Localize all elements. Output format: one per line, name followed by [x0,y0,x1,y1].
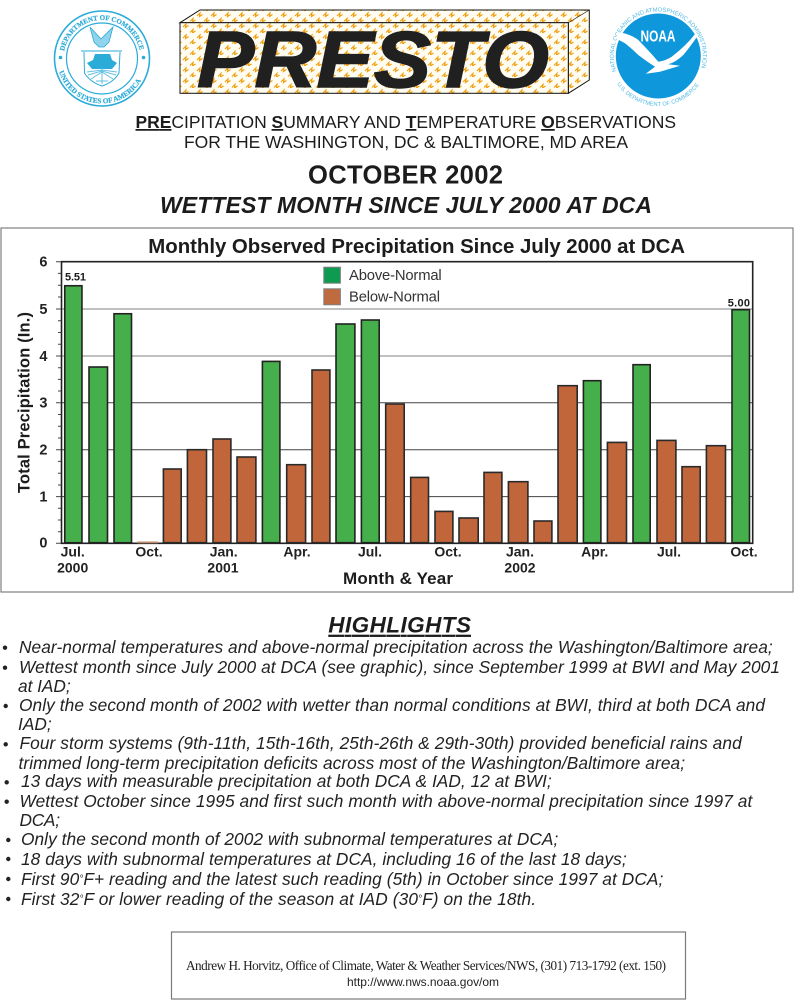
x-axis labels: Jul. [657,544,681,560]
x-axis labels: Jan. [506,544,534,560]
logo: Department of Commerce seal: UNITED STATES OF AMERICA [59,70,142,104]
logo: NOAA emblem: U.S. DEPARTMENT OF COMMERCE [618,82,699,106]
subtitle: PRECIPITATION SUMMARY AND TEMPERATURE OBSERVATIONS [136,112,676,132]
text block: highlights list: First 32 [21,889,79,909]
text block: highlights list: Only the second month of 2002 with subnormal temperatures at DCA; [21,829,558,849]
x-axis labels: 2000 [57,560,88,576]
y-axis numbers: 3 [39,396,48,412]
logo: NOAA emblem [610,7,707,106]
value label: July 2000: 5.51 [65,272,86,284]
x-axis labels: Apr. [283,544,311,560]
text block: highlights list: 18 days with subnormal temperatures at DCA, including 16 of the last 18 days; [21,849,627,869]
y-axis numbers: 4 [39,349,48,365]
chart gridlines and axes [56,262,753,543]
text block: highlights list: Near-normal temperatures and above-normal precipitation across the Washington/Baltimore area; [19,637,773,657]
panel: precipitation chart [1,228,793,592]
subtitle [136,112,676,152]
text block: highlights list: F or lower reading of the season at IAD (30 [84,889,418,909]
x-axis title: Month & Year [343,569,453,588]
y-axis numbers: 1 [39,490,48,506]
value label: October 2002: 5.00 [728,297,750,309]
logo: Department of Commerce seal [54,10,150,107]
x-axis labels: Oct. [434,544,462,560]
panel: author credit [172,932,686,999]
y-axis title: Total Precipitation (In.) [15,312,33,493]
text block: highlights list: 13 days with measurable precipitation at both DCA & IAD, 12 at BWI; [21,771,552,791]
y-axis numbers: 5 [39,302,48,318]
text block: highlights list: ° [79,894,83,905]
text block: highlights list: Wettest month since July 2000 at DCA (see graphic), since September 1999 at BWI and May 2001 [19,657,780,677]
text block: highlights list: F+ reading and the latest such reading (5th) in October since 1997 at DCA; [83,869,663,889]
x-axis labels [57,544,758,576]
text block: highlights list: at IAD; [18,676,71,696]
x-axis labels: Oct. [135,544,163,560]
text block: highlights list: DCA; [20,810,60,830]
text block: highlights list: ° [79,874,83,885]
y-axis numbers: 6 [39,255,48,271]
logo: Department of Commerce seal: DEPARTMENT OF COMMERCE [60,15,144,52]
text block: highlights list: ° [418,894,422,905]
subtitle: FOR THE WASHINGTON, DC & BALTIMORE, MD AREA [184,132,628,152]
x-axis labels: Apr. [581,544,608,560]
title: month: OCTOBER 2002 [308,162,503,190]
text block: highlights list: IAD; [18,714,52,734]
text block: highlights list: F) on the 18th. [422,889,536,909]
x-axis labels: Jul. [61,544,85,560]
website: http://www.nws.noaa.gov/om [347,975,499,989]
y-axis numbers: 2 [39,443,48,459]
logo: NOAA emblem: NATIONAL OCEANIC AND ATMOSPHERIC ADMINISTRATION [610,7,707,72]
x-axis labels: 2002 [504,560,536,576]
logo: PRESTO 3D block: PRESTO [197,15,549,104]
text block: highlights list: Four storm systems (9th-11th, 15th-16th, 25th-26th & 29th-30th) provided beneficial rains and [20,733,743,753]
x-axis labels: Jul. [358,544,382,560]
title: headline: WETTEST MONTH SINCE JULY 2000 AT DCA [160,192,652,218]
chart title: Monthly Observed Precipitation Since July 2000 at DCA [148,236,685,258]
legend: Below-Normal [349,290,440,306]
bars: below-normal months [137,370,726,543]
x-axis labels: Jan. [210,544,238,560]
x-axis labels: Oct. [730,544,758,560]
y-axis numbers [39,255,48,552]
heading: highlights: HIGHLIGHTS [328,613,471,638]
logo: NOAA emblem: NOAA [640,28,676,46]
bars: above-normal months [65,286,750,543]
author line: Andrew H. Horvitz, Office of Climate, Water & Weather Services/NWS, (301) 713-1792 (ext. 150) [186,958,666,973]
text block: highlights list: Only the second month of 2002 with wetter than normal conditions at BWI, third at both DCA and [19,695,766,715]
text block: highlights list: Wettest October since 1995 and first such month with above-normal precipitation since 1997 at [20,791,753,811]
text block: highlights list: trimmed long-term precipitation deficits across most of the Washington/Baltimore area; [18,753,685,773]
y-axis numbers: 0 [39,536,48,552]
text block: highlights list: First 90 [21,869,79,889]
legend: Above-Normal [349,268,442,284]
legend [324,267,442,306]
x-axis labels: 2001 [207,560,239,576]
text block: highlights list [3,637,780,909]
